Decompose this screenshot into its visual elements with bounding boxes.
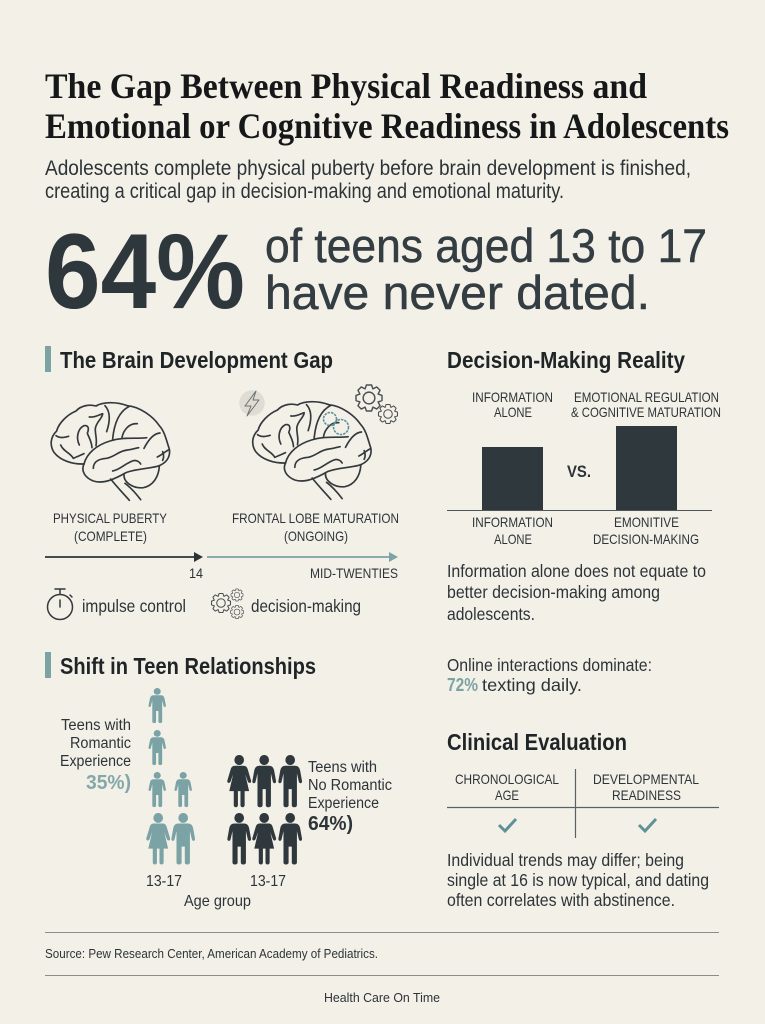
icon: lightning bbox=[239, 390, 265, 416]
labels above bars bbox=[472, 389, 721, 420]
text: information statement: adolescents. bbox=[447, 604, 535, 624]
subtitle: Adolescents complete physical puberty before brain development is finished, bbox=[45, 157, 691, 180]
label: teens with romantic experience: Experience bbox=[60, 753, 131, 770]
label: teens with no romantic experience: 64%) bbox=[308, 813, 353, 835]
labels above bars: INFORMATION bbox=[472, 389, 553, 405]
bar chart bbox=[447, 426, 712, 510]
bar chart: VS. bbox=[567, 462, 591, 481]
axis labels: 13-17 bbox=[250, 873, 286, 890]
text: online interactions: texting daily. bbox=[482, 675, 582, 695]
labels below bars: DECISION-MAKING bbox=[593, 531, 699, 547]
heading: decision-making reality: Decision-Making Reality bbox=[447, 347, 685, 373]
pictogram: teens with no romantic experience bbox=[227, 755, 302, 864]
labels below bars: EMONITIVE bbox=[614, 514, 679, 530]
big statistic: of teens aged 13 to 17 bbox=[265, 219, 707, 272]
comparison table bbox=[447, 769, 719, 838]
label: teens with romantic experience: Romantic bbox=[70, 735, 131, 752]
icon: brain complete bbox=[51, 403, 170, 500]
labels below bars: INFORMATION bbox=[472, 514, 553, 530]
label: frontal lobe maturation: FRONTAL LOBE MATURATION bbox=[232, 510, 399, 526]
comparison table: AGE bbox=[495, 787, 519, 803]
panel: shift in teen relationships bbox=[45, 652, 392, 910]
label: teens with romantic experience: 35%) bbox=[86, 772, 131, 794]
labels above bars: EMOTIONAL REGULATION bbox=[574, 389, 719, 405]
heading: clinical evaluation: Clinical Evaluation bbox=[447, 729, 627, 755]
title bbox=[45, 66, 729, 146]
text: individual trends bbox=[447, 850, 709, 910]
label: teens with no romantic experience: No Romantic bbox=[308, 777, 392, 794]
icon: frontal lobe highlight bbox=[324, 412, 348, 434]
axis labels bbox=[146, 873, 286, 910]
icon: brain developing bbox=[253, 402, 371, 499]
pictogram: teens with romantic experience bbox=[146, 688, 195, 864]
title: The Gap Between Physical Readiness and bbox=[45, 66, 647, 106]
arrow: brain timeline bbox=[207, 552, 398, 562]
label: decision-making: decision-making bbox=[251, 596, 361, 616]
panel: brain development gap bbox=[45, 346, 399, 620]
comparison table: CHRONOLOGICAL bbox=[455, 771, 559, 787]
label: physical puberty bbox=[53, 510, 168, 544]
heading: brain development gap: The Brain Development Gap bbox=[60, 347, 333, 373]
text: individual trends: single at 16 is now typical, and dating bbox=[447, 870, 709, 890]
text: online interactions: 72% bbox=[447, 675, 478, 695]
comparison table: READINESS bbox=[612, 787, 681, 803]
text: information statement: Information alone does not equate to bbox=[447, 561, 706, 581]
labels below bars: ALONE bbox=[494, 531, 532, 547]
comparison table: DEVELOPMENTAL bbox=[593, 771, 699, 787]
text: individual trends: often correlates with abstinence. bbox=[447, 890, 675, 910]
big statistic bbox=[45, 211, 707, 331]
label: age 14: 14 bbox=[189, 565, 203, 581]
big statistic: have never dated. bbox=[265, 266, 650, 319]
label: physical puberty: (COMPLETE) bbox=[74, 528, 147, 544]
label: impulse control: impulse control bbox=[82, 596, 186, 616]
label: teens with romantic experience bbox=[60, 717, 131, 794]
subtitle: creating a critical gap in decision-making and emotional maturity. bbox=[45, 180, 564, 203]
arrow: physical timeline bbox=[45, 552, 203, 562]
panel: decision-making reality bbox=[447, 347, 721, 695]
text: information statement: better decision-making among bbox=[447, 582, 660, 602]
text: online interactions: Online interactions dominate: bbox=[447, 655, 652, 675]
labels above bars: & COGNITIVE MATURATION bbox=[571, 404, 721, 420]
axis labels: 13-17 bbox=[146, 873, 182, 890]
label: teens with no romantic experience: Experience bbox=[308, 795, 379, 812]
icon: small gear bbox=[378, 404, 398, 424]
label: mid-twenties: MID-TWENTIES bbox=[310, 565, 398, 581]
subtitle bbox=[45, 157, 691, 203]
icon: large gear bbox=[356, 385, 382, 411]
panel: clinical evaluation bbox=[447, 729, 719, 910]
label: physical puberty: PHYSICAL PUBERTY bbox=[53, 510, 168, 526]
label: frontal lobe maturation: (ONGOING) bbox=[284, 528, 348, 544]
icon: gears bbox=[212, 589, 244, 618]
axis labels: Age group bbox=[184, 893, 251, 910]
label: teens with no romantic experience bbox=[308, 759, 392, 835]
labels below bars bbox=[472, 514, 699, 547]
footer: Health Care On Time bbox=[324, 990, 440, 1005]
big statistic: 64% bbox=[45, 211, 245, 331]
text: online interactions bbox=[447, 655, 652, 695]
text: individual trends: Individual trends may differ; being bbox=[447, 850, 684, 870]
label: teens with no romantic experience: Teens with bbox=[308, 759, 377, 776]
labels above bars: ALONE bbox=[494, 404, 532, 420]
text: information statement bbox=[447, 561, 706, 624]
icon: stopwatch bbox=[48, 589, 72, 620]
heading: shift in teen relationships: Shift in Teen Relationships bbox=[60, 653, 316, 679]
source: Source: Pew Research Center, American Academy of Pediatrics. bbox=[45, 946, 378, 961]
label: frontal lobe maturation bbox=[232, 510, 399, 544]
label: teens with romantic experience: Teens with bbox=[61, 717, 131, 734]
